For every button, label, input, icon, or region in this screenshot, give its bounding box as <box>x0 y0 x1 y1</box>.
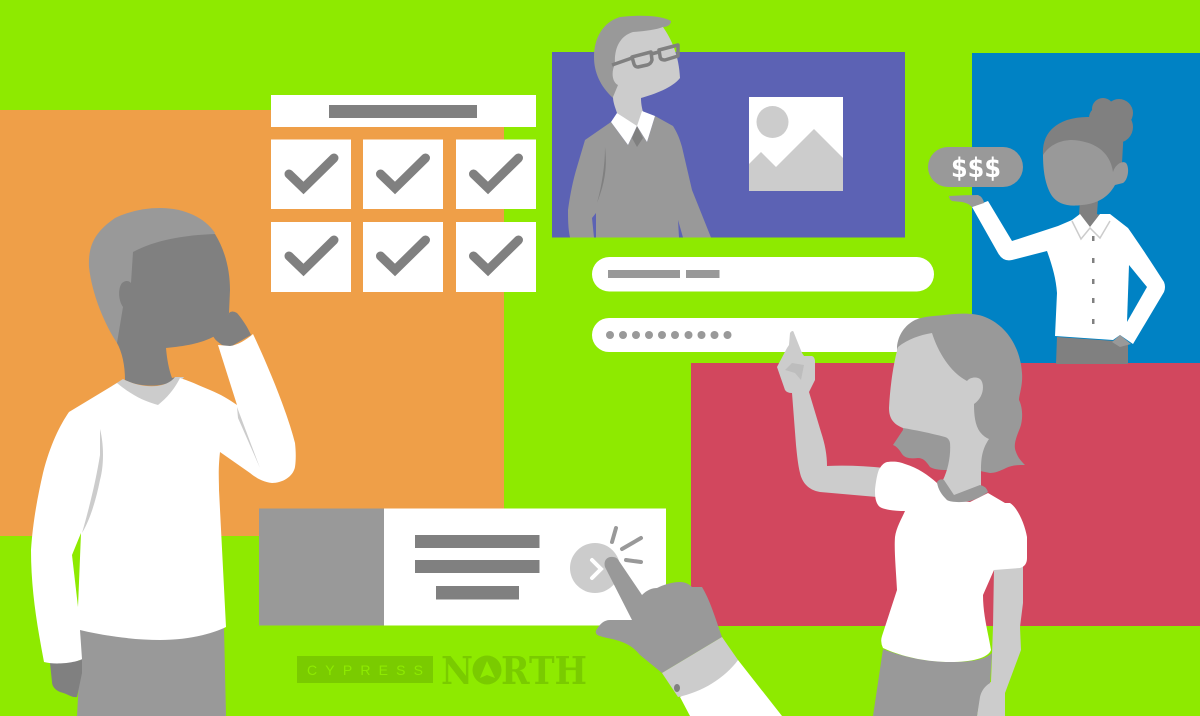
man: sweater <box>568 116 711 238</box>
pointing hand <box>596 557 782 716</box>
hip hand <box>1112 335 1131 347</box>
logo wordmark: N <box>441 648 473 693</box>
panel: orange <box>0 110 504 536</box>
panel: blue <box>972 53 1200 364</box>
grey undershirt <box>112 377 184 412</box>
panel: purple with man in glasses <box>552 16 905 237</box>
right arm <box>977 566 1023 716</box>
trousers <box>1056 337 1128 364</box>
check card 1 <box>271 140 351 209</box>
necklace collar <box>937 479 988 502</box>
man thinking (foreground) <box>31 208 296 716</box>
white sweater <box>31 334 296 663</box>
raised arm and hand <box>777 331 885 497</box>
logo: Cypress North <box>297 648 587 693</box>
hair <box>1043 117 1123 175</box>
price bubble <box>928 147 1023 187</box>
man: glasses <box>612 45 678 67</box>
man: sleeve shadow <box>597 147 606 203</box>
skirt <box>873 649 992 716</box>
banner card <box>259 508 666 626</box>
woman with bun on blue panel <box>949 98 1165 364</box>
man: face and neck <box>613 27 680 127</box>
neck <box>1079 200 1100 228</box>
hand <box>596 557 722 673</box>
hair <box>893 314 1025 473</box>
face and neck <box>889 333 989 497</box>
logo box: CYPRESS <box>307 662 423 678</box>
woman pointing (foreground) <box>777 314 1027 716</box>
arm gap <box>1127 265 1147 322</box>
purple backdrop <box>552 52 905 238</box>
shirt <box>972 201 1165 344</box>
check card 2 <box>363 140 443 209</box>
check card 6 <box>456 222 536 292</box>
man: tie <box>632 126 643 147</box>
banner text lines <box>415 535 540 600</box>
trousers <box>77 627 226 716</box>
face <box>1043 140 1128 206</box>
form field: name <box>592 257 934 292</box>
sleeve <box>680 660 782 716</box>
face and neck <box>117 234 230 386</box>
panel: red <box>691 363 1200 626</box>
logo box <box>297 656 433 683</box>
form field: password <box>592 318 934 352</box>
raised hand <box>949 195 984 207</box>
image placeholder icon <box>749 97 843 191</box>
check card 5 <box>363 222 443 292</box>
check card 4 <box>271 222 351 292</box>
cuff <box>662 637 738 697</box>
white shirt <box>875 462 1027 662</box>
grid header <box>271 95 536 127</box>
banner image block <box>259 508 384 626</box>
man: white collar <box>611 111 655 145</box>
arm fold <box>237 407 260 468</box>
shirt collar lines <box>1072 221 1110 239</box>
man: hair <box>594 16 671 98</box>
hair <box>89 208 215 343</box>
logo wordmark <box>441 648 587 693</box>
left hand <box>50 660 82 697</box>
sleeve fold <box>82 429 103 533</box>
gap between arm and torso <box>72 533 81 607</box>
checklist grid <box>271 95 536 292</box>
price bubble: $$$ <box>951 153 1001 184</box>
shirt buttons <box>1092 236 1094 324</box>
palm shadow <box>785 363 804 380</box>
cuff button <box>674 684 680 692</box>
check card 3 <box>456 140 536 209</box>
arrow button <box>570 543 620 593</box>
hand at chin <box>213 312 251 347</box>
bun <box>1089 98 1133 143</box>
logo wordmark: RTH <box>501 648 587 693</box>
click spark lines <box>612 528 641 562</box>
